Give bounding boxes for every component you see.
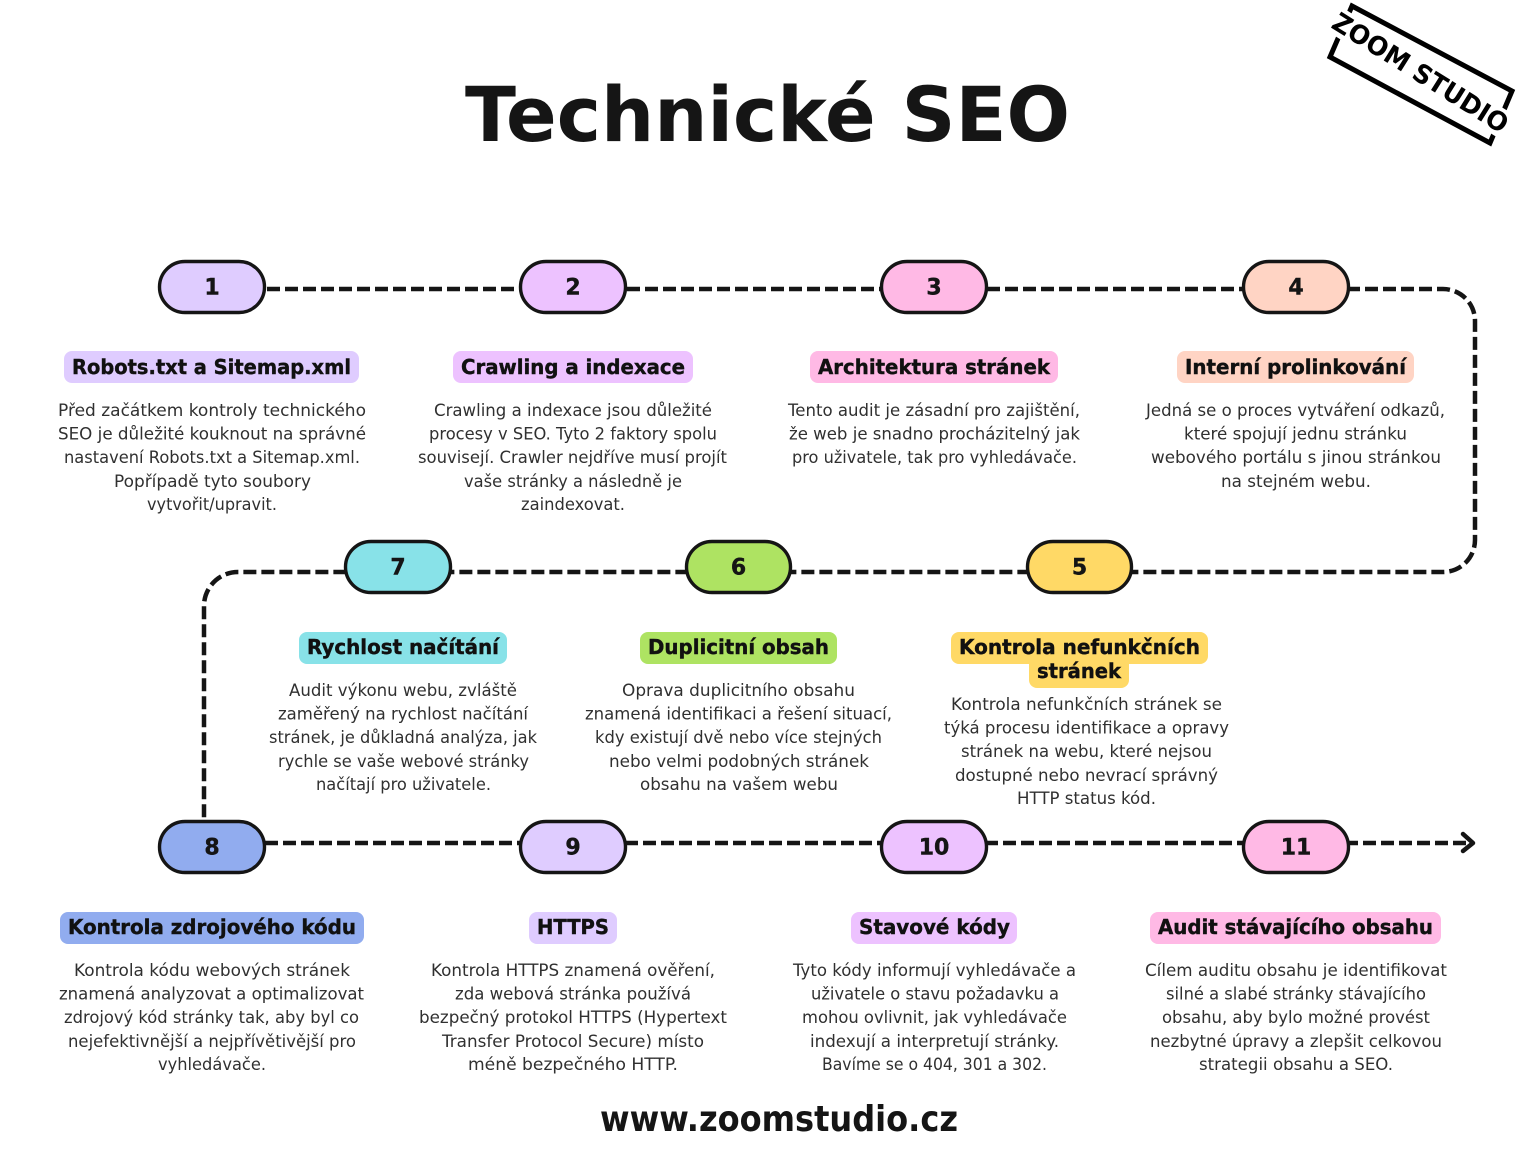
step 9 text: bezpečný protokol HTTPS (Hypertext [419,1008,728,1027]
footer website URL: www.zoomstudio.cz [600,1099,958,1140]
step 1 text: Popřípadě tyto soubory [114,472,311,491]
step 1 badge [160,262,264,312]
step 11 text: Cílem auditu obsahu je identifikovat [1145,961,1448,980]
step 11 heading: Audit stávajícího obsahu [1158,915,1433,939]
step 4 text [1145,401,1445,491]
step 1 text: Před začátkem kontroly technického [58,401,366,420]
step 6 text: nebo velmi podobných stránek [609,752,869,771]
step 2 heading: Crawling a indexace [461,355,685,379]
step 4 text: které spojují jednu stránku [1184,424,1407,444]
step 10 text: uživatele o stavu požadavku a [811,984,1059,1004]
dashed timeline path: row 1 to row 2 to row 3 [204,289,1475,820]
step 2 text: zaindexovat. [521,495,625,514]
step 7 heading [299,632,507,664]
step 9 text: zda webová stránka používá [455,984,691,1004]
step 6 text [585,681,892,794]
step 10 text [792,961,1076,1074]
step 8 badge: 8 [204,836,220,860]
step 9 text: Kontrola HTTPS znamená ověření, [431,961,715,980]
step 8 text: znamená analyzovat a optimalizovat [59,984,365,1004]
step 5 heading: Kontrola nefunkčních [959,635,1200,659]
step 3 badge [882,262,986,312]
step 3 heading: Architektura stránek [818,355,1051,379]
panel: step 8 [59,822,365,1074]
step 1 text: vytvořit/upravit. [147,495,277,514]
step 9 heading [529,912,617,944]
step 9 text: Transfer Protocol Secure) místo [441,1032,704,1051]
panel: step 9 [419,822,728,1074]
step 6 badge [686,542,790,592]
panel: step 11 [1145,822,1448,1074]
step 9 text [419,961,728,1074]
title: Technické SEO [465,70,1070,159]
panel: step 6 [585,542,892,794]
step 2 text [418,401,728,514]
step 8 heading: Kontrola zdrojového kódu [68,915,356,939]
step 9 badge: 9 [565,836,581,860]
panel: step 5 [944,542,1229,808]
step 4 text: Jedná se o proces vytváření odkazů, [1145,401,1445,420]
step 9 text: méně bezpečného HTTP. [468,1055,678,1074]
step 6 heading: Duplicitní obsah [648,635,829,659]
step 11 badge: 11 [1281,836,1311,860]
step 4 text: webového portálu s jinou stránkou [1151,448,1441,467]
step 2 text: Crawling a indexace jsou důležité [434,401,712,420]
step 1 text: nastavení Robots.txt a Sitemap.xml. [64,448,360,467]
step 7 text: zaměřený na rychlost načítání [278,704,529,724]
step 6 text: Oprava duplicitního obsahu [622,681,855,700]
step 11 text: silné a slabé stránky stávajícího [1166,984,1426,1004]
step 7 badge: 7 [390,556,406,580]
step 5 heading: stránek [1037,659,1122,683]
step 10 text: indexují a interpretují stránky. [810,1032,1059,1051]
step 3 text: pro uživatele, tak pro vyhledávače. [792,448,1077,467]
step 6 text: znamená identifikaci a řešení situací, [585,704,892,724]
step 1 badge: 1 [204,276,220,300]
step 8 text: Kontrola kódu webových stránek [74,961,350,980]
step 8 text: zdrojový kód stránky tak, aby byl co [64,1008,359,1027]
step 3 text: že web je snadno procházitelný jak [789,424,1080,444]
step 11 text: strategii obsahu a SEO. [1199,1055,1393,1074]
step 6 text: obsahu na vašem webu [640,775,838,794]
step 2 badge: 2 [565,276,581,300]
step 5 heading [951,632,1208,688]
step 5 text: týká procesu identifikace a opravy [944,718,1229,738]
step 10 text: Tyto kódy informují vyhledávače a [792,961,1076,980]
step 10 badge: 10 [919,836,949,860]
panel: step 10 [792,822,1076,1074]
panel: step 7 [269,542,537,794]
step 5 text: Kontrola nefunkčních stránek se [951,695,1222,714]
step 7 heading: Rychlost načítání [307,635,500,659]
panel: step 4 [1145,262,1445,491]
step 1 text: SEO je důležité kouknout na správné [58,424,366,444]
step 2 text: vaše stránky a následně je [464,472,682,491]
step 11 text: nezbytné úpravy a zlepšit celkovou [1150,1032,1442,1051]
step 10 heading [851,912,1017,944]
step 5 text [944,695,1229,808]
step 1 text [58,401,366,514]
step 3 text [787,401,1080,467]
panel: step 2 [418,262,728,514]
step 11 badge [1244,822,1348,872]
logo: Zoom Studio stamp: ZOOM STUDIO [1326,7,1513,140]
step 7 text: načítají pro uživatele. [316,775,491,794]
step 11 text [1145,961,1448,1074]
step 8 text: vyhledávače. [158,1055,266,1074]
step 7 text: stránek, je důkladná analýza, jak [269,728,537,747]
step 8 badge [160,822,264,872]
step 10 badge [882,822,986,872]
step 4 badge: 4 [1288,276,1304,300]
step 9 badge [520,822,626,872]
step 2 text: souvisejí. Crawler nejdříve musí projít [418,448,728,467]
step 7 text: Audit výkonu webu, zvláště [289,681,517,700]
step 4 badge [1244,262,1348,312]
step 5 text: dostupné nebo nevrací správný [955,766,1218,785]
step 2 badge [520,262,626,312]
panel: step 1 [58,262,366,514]
step 10 text: mohou ovlivnit, jak vyhledávače [802,1008,1067,1027]
step 4 heading: Interní prolinkování [1185,355,1407,379]
step 5 badge: 5 [1072,556,1087,580]
step 5 text: HTTP status kód. [1017,789,1156,808]
step 8 text [59,961,365,1074]
step 4 text: na stejném webu. [1221,472,1371,491]
step 7 badge [346,542,450,592]
step 10 text: Bavíme se o 404, 301 a 302. [822,1055,1047,1074]
step 11 text: obsahu, aby bylo možné provést [1162,1008,1431,1027]
step 3 badge: 3 [926,276,942,300]
step 7 text: rychle se vaše webové stránky [278,752,529,771]
step 1 heading: Robots.txt a Sitemap.xml [72,355,351,379]
step 8 text: nejefektivnější a nejpřívětivější pro [68,1032,356,1051]
step 10 heading: Stavové kódy [859,915,1010,939]
dashed timeline arrow: row 3 [265,834,1473,851]
step 7 text [269,681,537,794]
step 5 badge [1028,542,1132,592]
step 6 badge: 6 [731,556,746,580]
panel: step 3 [787,262,1080,467]
step 6 text: kdy existují dvě nebo více stejných [595,728,882,747]
step 6 heading [640,632,837,664]
step 9 heading: HTTPS [537,915,609,939]
step 3 text: Tento audit je zásadní pro zajištění, [787,401,1080,420]
step 5 text: stránek na webu, které nejsou [961,742,1212,761]
step 2 text: procesy v SEO. Tyto 2 faktory spolu [429,424,717,444]
